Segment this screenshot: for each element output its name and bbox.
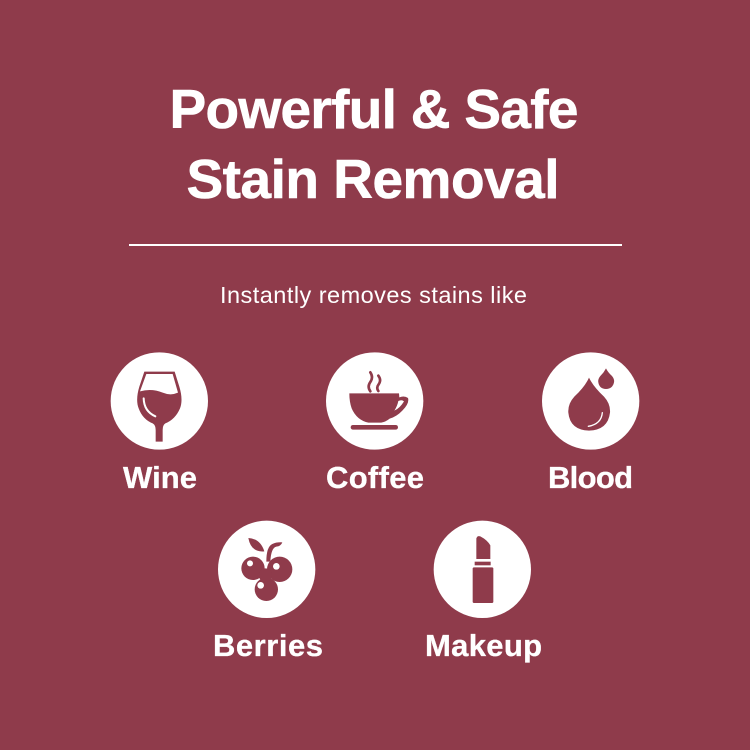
subtitle: Instantly removes stains like	[220, 282, 527, 308]
icon: blood drops	[542, 352, 639, 450]
item: blood	[542, 352, 639, 495]
icon: lipstick	[434, 521, 531, 618]
icon: berries	[218, 521, 315, 618]
item: makeup	[425, 521, 542, 663]
item: wine	[111, 352, 208, 495]
label: wine: Wine	[123, 460, 197, 495]
label: blood: Blood	[548, 460, 633, 495]
item: berries	[213, 521, 323, 663]
title: Powerful & Safe	[170, 78, 578, 140]
label: coffee: Coffee	[326, 460, 424, 495]
item: coffee	[326, 352, 424, 495]
icon: coffee cup	[326, 352, 423, 450]
title	[170, 78, 578, 210]
title: Stain Removal	[186, 148, 560, 210]
label: makeup: Makeup	[425, 628, 542, 663]
label: berries: Berries	[213, 628, 323, 663]
icon: wine glass	[111, 352, 208, 450]
